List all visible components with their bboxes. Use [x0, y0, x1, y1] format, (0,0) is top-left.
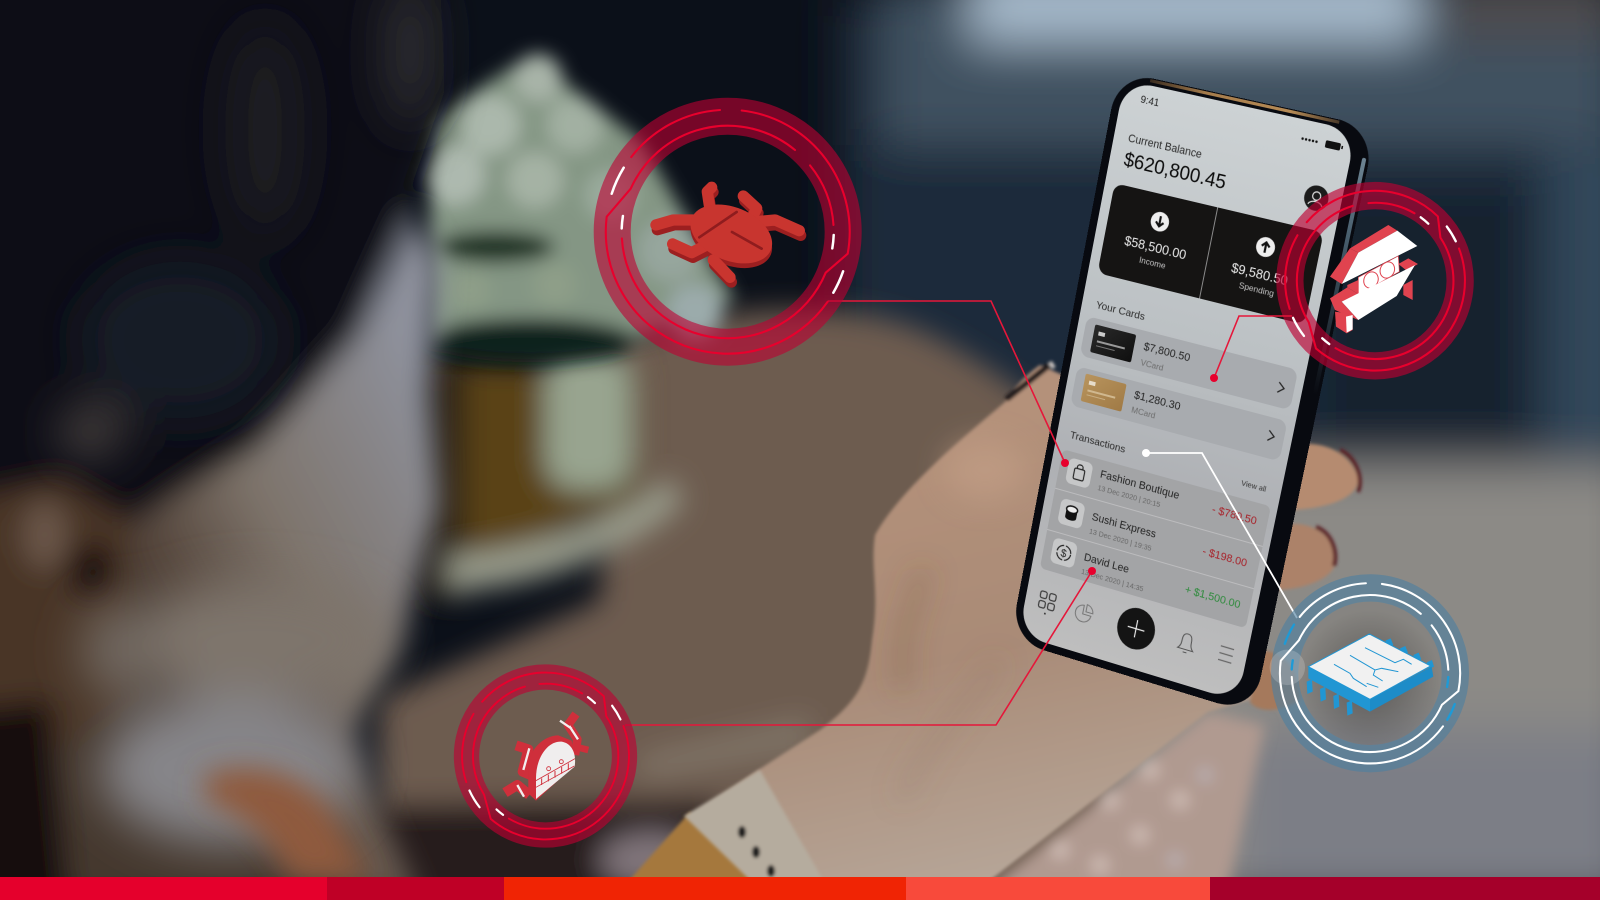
merchant name: Fashion Boutique: [1099, 469, 1180, 502]
bottom colour bar: [0, 877, 1600, 900]
date: 13 Dec 2020 | 19:35: [1088, 526, 1152, 553]
ring: hardware chip: [1268, 582, 1462, 765]
icon: bug: [656, 187, 801, 282]
current balance amount: $620,800.45: [1122, 149, 1228, 194]
phone screen: [1019, 80, 1356, 701]
income arrow icon: [1150, 212, 1170, 232]
transaction: David Lee: [1050, 538, 1241, 611]
amount: - $198.00: [1201, 545, 1248, 570]
shopping bag icon: [1065, 457, 1094, 489]
connector: bug to shopping bag: [828, 301, 1069, 467]
black card thumbnail: [1090, 324, 1136, 363]
hand holding the phone: [625, 362, 1360, 885]
date: 13 Dec 2020 | 14:35: [1081, 567, 1144, 593]
menu icon: [1218, 645, 1234, 664]
chevron: [1276, 382, 1286, 393]
background: person, hair and neck: [0, 0, 445, 900]
background: room on the right: [840, 0, 1600, 900]
background: hair highlights: [60, 0, 436, 452]
VCard balance: $7,800.50: [1143, 341, 1191, 365]
bell icon: [1176, 633, 1194, 654]
VCard name: VCard: [1140, 357, 1164, 373]
grid icon: [1038, 590, 1057, 615]
card row: VCard: [1080, 316, 1298, 410]
dollar icon: [1050, 537, 1078, 569]
phone mockup with banking app: [1010, 71, 1376, 714]
pie chart icon: [1074, 604, 1094, 623]
icon: microchip: [1307, 634, 1434, 716]
MCard name: MCard: [1131, 404, 1156, 420]
background: golden pot and plate: [420, 350, 684, 600]
background: lower neck tones: [80, 580, 390, 845]
spending arrow icon: [1256, 236, 1276, 258]
card row: MCard: [1070, 366, 1288, 461]
gold card thumbnail: [1081, 373, 1127, 412]
amount: - $780.50: [1211, 504, 1258, 528]
spending amount: $9,580.50: [1230, 260, 1289, 288]
background: table: [340, 310, 1110, 900]
icon: hardware device: [1330, 225, 1418, 333]
dollar icon: $: [1060, 548, 1067, 561]
current balance label: Current Balance: [1127, 132, 1203, 161]
amount: + $1,500.00: [1184, 584, 1241, 611]
row separators: [1055, 488, 1263, 547]
bottom navigation bar: [1038, 590, 1234, 664]
add button: [1116, 608, 1156, 650]
watch strap: [684, 770, 826, 885]
panel divider: [1199, 207, 1218, 299]
background: flowers: [425, 54, 735, 362]
transactions heading: Transactions: [1069, 429, 1126, 456]
user avatar: [1304, 185, 1329, 211]
background: pink dotted dress: [975, 712, 1265, 900]
background: orange reflection: [205, 768, 370, 880]
MCard balance: $1,280.30: [1133, 389, 1181, 413]
icon: robot: [505, 714, 588, 801]
status bar signal and battery: [1301, 137, 1344, 151]
view all link: View all: [1241, 478, 1267, 494]
transactions list: [1040, 449, 1271, 628]
ring: bug: [606, 110, 850, 354]
payer name: David Lee: [1083, 552, 1130, 576]
connector: chip to transactions: [1142, 449, 1297, 618]
status bar time: 9:41: [1139, 94, 1160, 110]
income amount: $58,500.00: [1123, 233, 1188, 263]
transaction: Fashion Boutique: [1066, 458, 1258, 528]
transaction: Sushi Express: [1058, 499, 1248, 570]
date: 13 Dec 2020 | 20:15: [1097, 483, 1161, 509]
ring: hardware device: [1250, 156, 1500, 405]
sushi icon: [1057, 498, 1086, 529]
spending label: Spending: [1238, 280, 1275, 298]
income and spending panel: [1097, 183, 1324, 325]
merchant name: Sushi Express: [1091, 511, 1157, 541]
connector: hardware device to cards: [1210, 316, 1292, 382]
income label: Income: [1138, 254, 1167, 271]
your cards heading: Your Cards: [1095, 299, 1146, 323]
ring: malicious robot: [430, 640, 661, 872]
hand shading: [900, 440, 1025, 800]
connector: robot to David Lee: [625, 567, 1096, 725]
chevron: [1266, 430, 1276, 441]
